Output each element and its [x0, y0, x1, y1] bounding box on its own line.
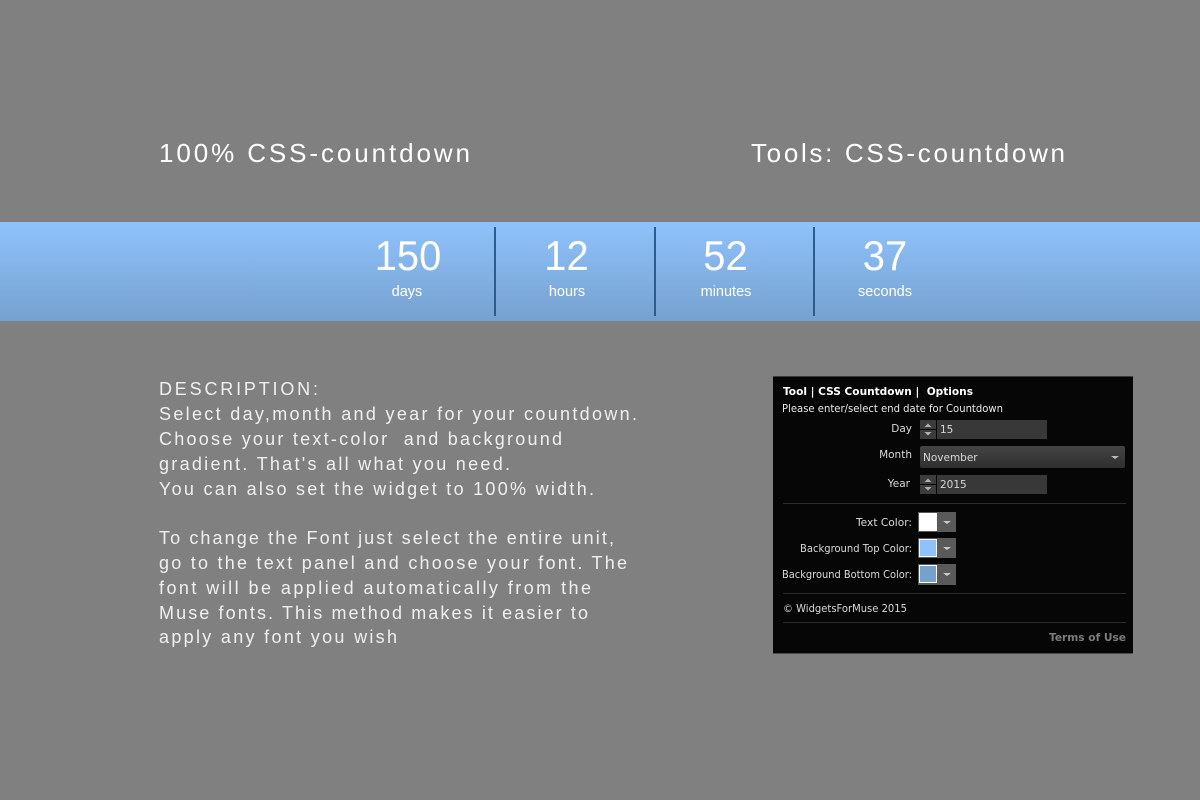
heading: 100% CSS-countdown: 100% CSS-countdown	[159, 138, 470, 168]
heading: Tools: CSS-countdown: Tools: CSS-countdown	[751, 138, 1065, 168]
panel: tool options	[773, 376, 1133, 654]
description text block: DESCRIPTION:	[159, 379, 318, 399]
field: month: Month	[879, 449, 912, 461]
description text block: apply any font you wish	[159, 627, 397, 647]
countdown unit: minutes	[701, 232, 751, 300]
field: month	[879, 446, 1125, 468]
countdown unit: seconds: seconds	[858, 284, 912, 300]
countdown unit: days	[375, 232, 441, 300]
color picker: text color	[855, 512, 956, 532]
field: year: Year	[887, 478, 911, 490]
panel instructions: Please enter/select end date for Countdown	[782, 403, 1003, 415]
description text block: Select day,month and year for your countdown.	[159, 404, 637, 424]
countdown unit: minutes: minutes	[701, 284, 751, 300]
panel title: Tool | CSS Countdown | Options	[783, 386, 973, 398]
field: day: 15	[940, 424, 953, 436]
countdown unit: hours: hours	[549, 284, 585, 300]
description text block: Muse fonts. This method makes it easier to	[159, 603, 588, 623]
description text block: font will be applied automatically from the	[159, 578, 591, 598]
countdown unit: days: 150	[375, 232, 441, 279]
description text block: To change the Font just select the entire unit,	[159, 528, 614, 548]
description text block: Choose your text-color and background	[159, 429, 562, 449]
countdown unit: hours	[544, 232, 589, 300]
color picker: text color: Text Color:	[855, 517, 912, 529]
field: year: 2015	[940, 479, 967, 491]
color picker: background top color	[800, 538, 956, 558]
field: year	[887, 475, 1047, 494]
countdown band	[0, 222, 1200, 321]
description text block	[159, 379, 637, 647]
countdown unit: days: days	[392, 284, 422, 300]
field: day: Day	[891, 423, 912, 435]
field: day	[891, 420, 1047, 439]
terms of use link: Terms of Use	[1049, 632, 1126, 644]
countdown unit: hours: 12	[544, 232, 589, 279]
field: month: November	[923, 452, 978, 464]
countdown unit: minutes: 52	[703, 232, 748, 279]
color picker: background bottom color: Background Bottom Color:	[782, 569, 912, 581]
color picker: background bottom color	[782, 564, 956, 585]
countdown unit: seconds: 37	[863, 232, 907, 279]
countdown unit: seconds	[858, 232, 912, 300]
description text block: You can also set the widget to 100% width.	[159, 479, 594, 499]
description text block: go to the text panel and choose your font. The	[159, 553, 627, 573]
copyright: © WidgetsForMuse 2015	[783, 603, 907, 615]
description text block: gradient. That's all what you need.	[159, 454, 510, 474]
color picker: background top color: Background Top Color:	[800, 543, 912, 555]
